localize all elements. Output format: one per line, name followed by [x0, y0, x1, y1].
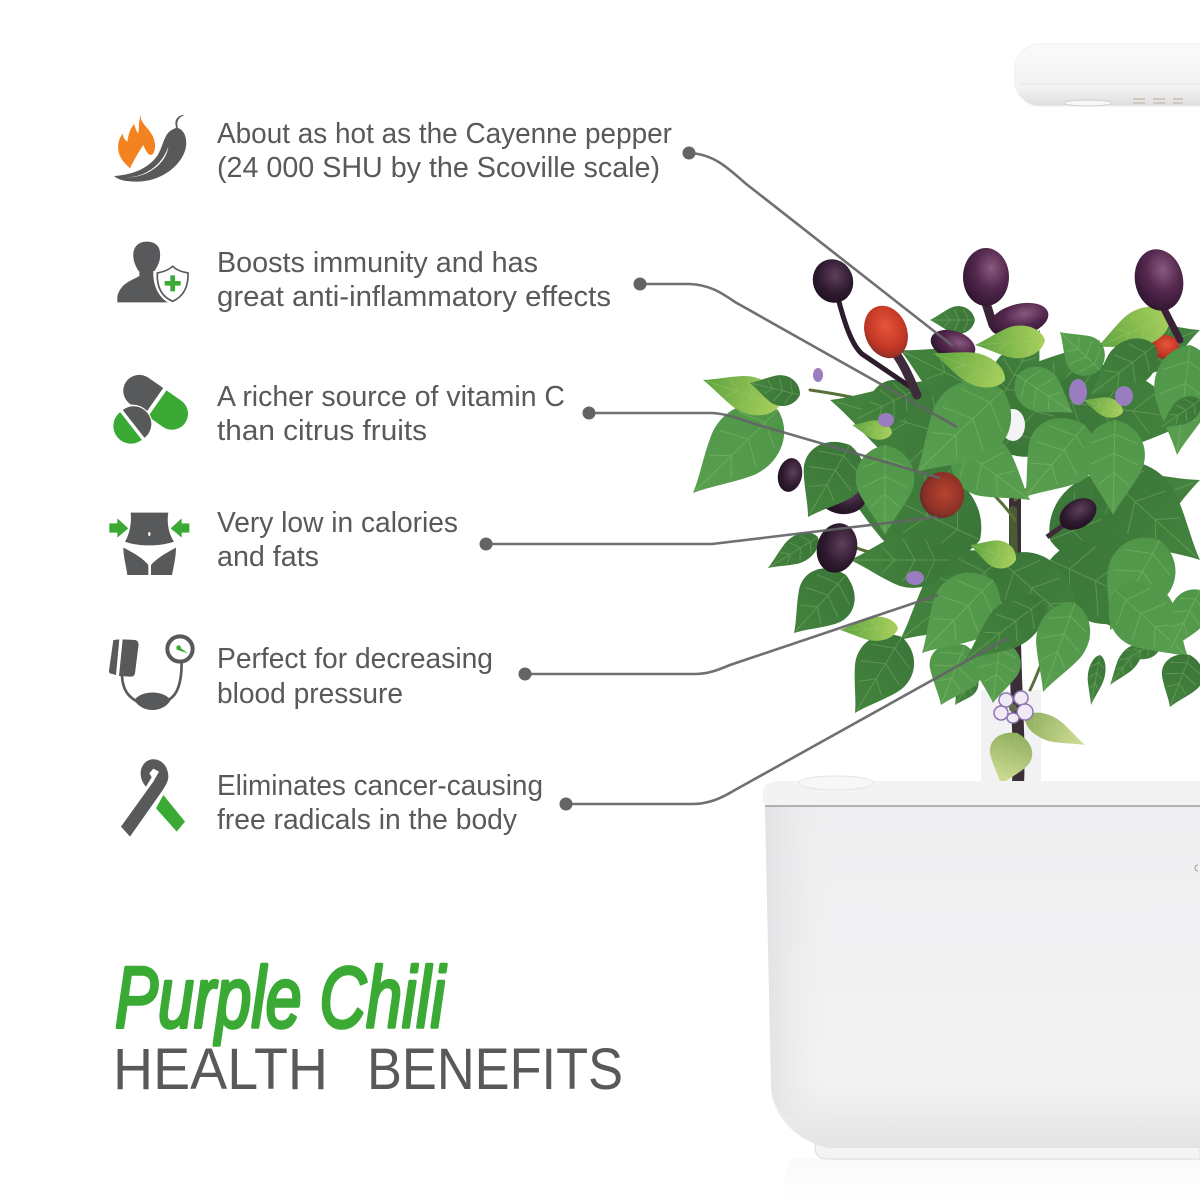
open flower on stem — [994, 691, 1033, 723]
white blossom in the canopy — [1001, 409, 1025, 441]
text: immunity — [217, 247, 611, 313]
text: cancer: Eliminates cancer-causing — [217, 770, 543, 802]
plant stems — [810, 340, 1200, 785]
planter lid — [763, 781, 1200, 806]
benefit 6: cancer — [121, 638, 1008, 837]
icon: ribbon — [121, 759, 185, 837]
icon: pills — [106, 369, 194, 451]
connector 1 — [682, 146, 953, 346]
title subtitle — [113, 1037, 623, 1102]
planter reflection — [780, 1158, 1200, 1200]
icon: waist with arrows — [109, 513, 189, 575]
text: cancer — [217, 770, 543, 836]
purple flowers — [813, 368, 1133, 585]
peppers behind leaves — [775, 297, 1179, 517]
text: calories — [217, 507, 458, 573]
icon: blood pressure monitor — [109, 636, 193, 710]
text: blood pressure: blood pressure — [217, 678, 403, 710]
connector 5 — [518, 595, 938, 680]
icon: person with shield — [117, 242, 191, 305]
connector 3 — [582, 406, 940, 478]
lamp hood — [1015, 44, 1200, 106]
text: blood pressure — [217, 643, 493, 710]
benefit 3: vitamin C — [106, 369, 940, 478]
text: blood pressure: Perfect for decreasing — [217, 643, 493, 675]
text: vitamin C: A richer source of vitamin C — [217, 381, 565, 413]
text: Scoville — [217, 118, 672, 184]
lid button — [799, 776, 873, 790]
connector 6 — [560, 638, 1008, 810]
text: immunity: Boosts immunity and has — [217, 247, 538, 279]
title script line: Purple Chili — [115, 950, 447, 1046]
text: calories: and fats — [217, 541, 319, 573]
title subtitle: HEALTH — [113, 1037, 328, 1102]
plant support tube — [981, 690, 1041, 786]
chili pods — [807, 245, 1189, 577]
benefit 4: low calories — [109, 507, 937, 575]
text: Scoville: About as hot as the Cayenne pepper — [217, 118, 672, 150]
text: cancer: free radicals in the body — [217, 804, 518, 836]
plant — [670, 245, 1200, 792]
text: immunity: great anti-inflammatory effects — [217, 281, 611, 313]
text: vitamin C — [217, 381, 565, 447]
text: calories: Very low in calories — [217, 507, 458, 539]
planter — [763, 776, 1200, 1200]
title — [113, 950, 623, 1102]
benefit 5: blood pressure — [109, 595, 938, 710]
connector 2 — [634, 278, 957, 427]
front foliage — [670, 298, 1200, 792]
text: vitamin C: than citrus fruits — [217, 415, 427, 447]
back foliage — [810, 306, 1200, 711]
icon: flame and chili — [114, 113, 186, 182]
benefit 2: immunity — [117, 242, 957, 427]
title subtitle: BENEFITS — [367, 1037, 623, 1102]
text: Scoville: (24 000 SHU by the Scoville scale) — [217, 152, 660, 184]
planter body — [765, 806, 1200, 1148]
connector 4 — [480, 517, 937, 550]
benefit 1: heat — [114, 113, 953, 346]
planter foot — [815, 1140, 1200, 1159]
